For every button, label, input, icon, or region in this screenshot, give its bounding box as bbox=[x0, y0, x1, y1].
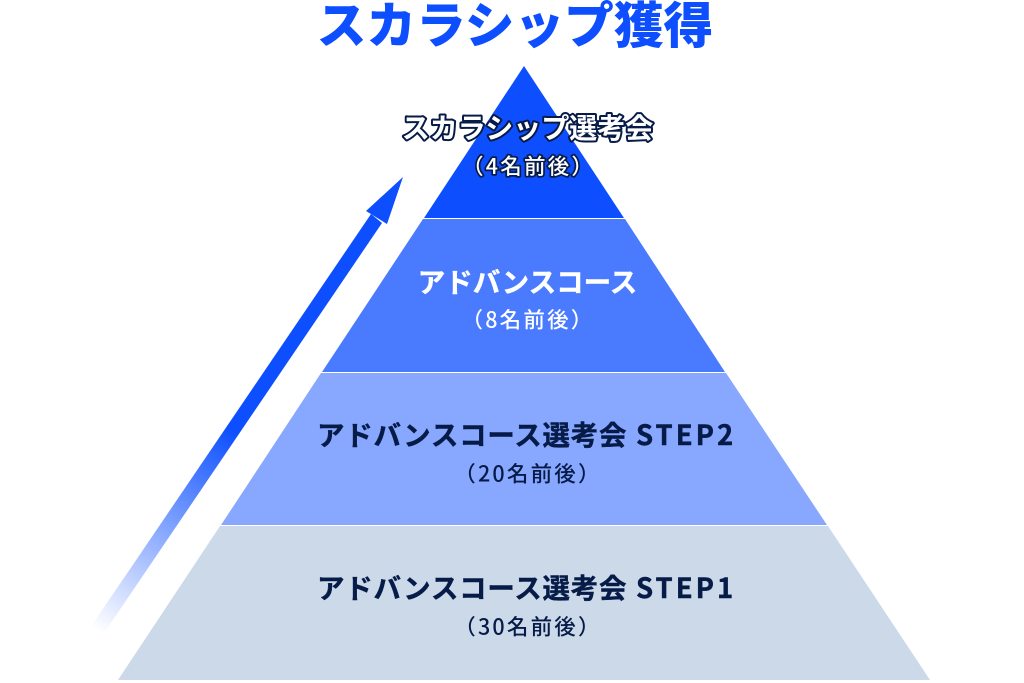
label: scholarship selection: スカラシップ選考会 bbox=[402, 107, 653, 147]
tier: scholarship selection bbox=[424, 66, 624, 218]
label: step 1: アドバンスコース選考会 bbox=[317, 566, 634, 606]
label: advanced course: アドバンスコース bbox=[418, 260, 637, 300]
label: advanced course bbox=[418, 260, 637, 334]
pyramid bbox=[118, 66, 930, 680]
arrow: upward progress bbox=[92, 177, 403, 633]
tier: advanced selection step 2 bbox=[221, 373, 827, 525]
tier: advanced course bbox=[322, 219, 725, 372]
label: step 1: STEP1 bbox=[636, 566, 736, 606]
label: scholarship selection: （4名前後） bbox=[462, 150, 595, 181]
tier: advanced selection step 1 bbox=[118, 526, 930, 680]
label: advanced course: （8名前後） bbox=[462, 304, 594, 334]
label: step 2: （20名前後） bbox=[454, 458, 602, 488]
label: step 2: アドバンスコース選考会 bbox=[317, 413, 634, 453]
label: scholarship selection bbox=[402, 107, 653, 181]
label: step 1: （30名前後） bbox=[454, 610, 602, 642]
label: step 2 bbox=[317, 413, 736, 488]
label: step 1 bbox=[317, 566, 736, 642]
label: step 2: STEP2 bbox=[636, 413, 736, 453]
